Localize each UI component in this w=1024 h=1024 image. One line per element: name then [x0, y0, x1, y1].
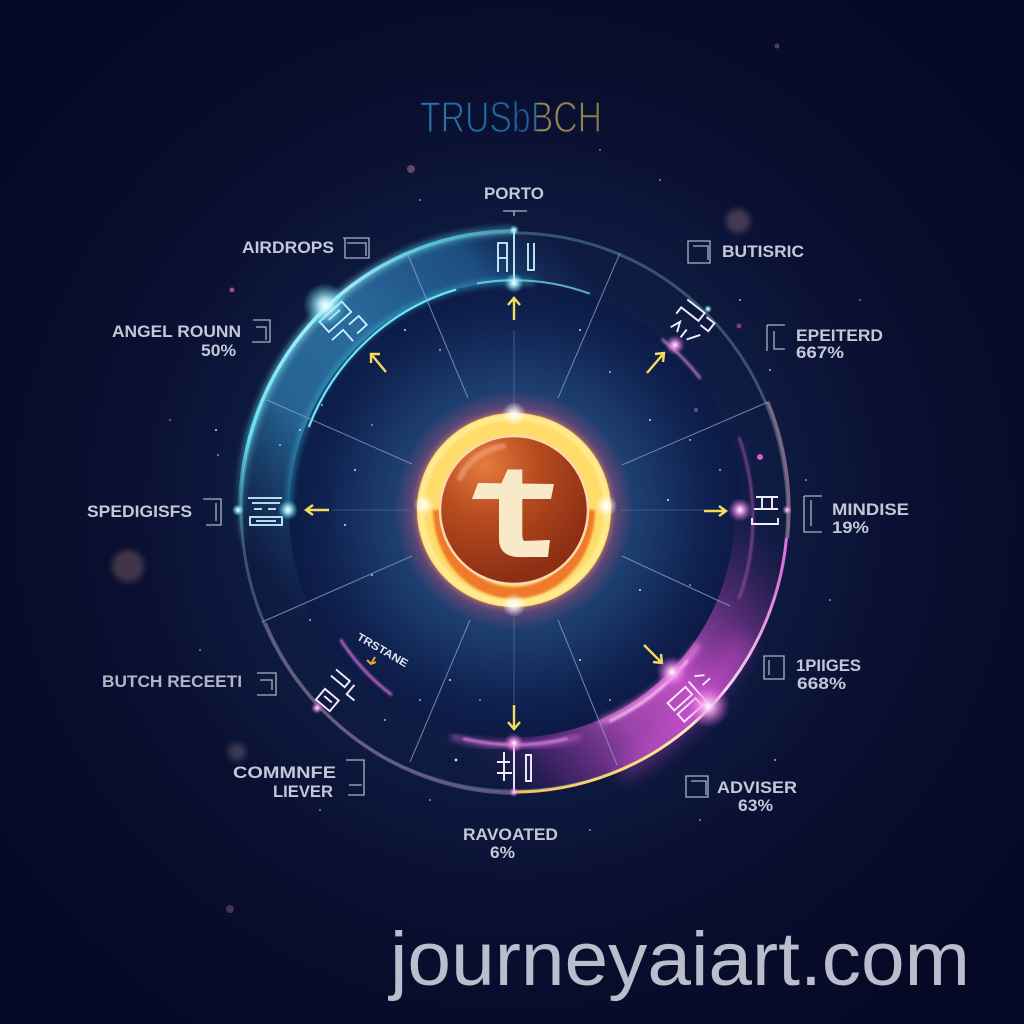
- label: MINDISE 19%: MINDISE: [832, 500, 909, 519]
- glyph: bottom: [497, 743, 531, 790]
- central disc: [286, 284, 742, 740]
- ring rim: dim pink right: [768, 402, 789, 538]
- label: MINDISE 19%: [804, 496, 909, 537]
- inner highlight: right: [739, 437, 753, 599]
- inner highlight: lower right: [600, 644, 698, 722]
- coin shine: [460, 446, 503, 478]
- arrow: left: [306, 505, 329, 515]
- coin letter crossbar: [472, 483, 554, 499]
- glyph: upper left: [317, 300, 369, 351]
- label: SPEDIGISFS: SPEDIGISFS: [87, 502, 192, 521]
- arrow: top: [508, 298, 520, 320]
- label: COMMNFE LIEVER: COMMNFE: [233, 763, 336, 782]
- label: ADVISER 63%: [686, 776, 797, 815]
- arrow: bottom: [508, 705, 520, 729]
- ring outline: [242, 233, 787, 791]
- coin face: [440, 436, 588, 584]
- coin inner rim shade: [439, 510, 589, 593]
- label: BUTCH RECEETI: [102, 672, 276, 695]
- coin letter foot: [522, 540, 550, 557]
- glyph: lower left: [313, 669, 362, 719]
- ring glow: magenta: [619, 639, 743, 771]
- label: BUTISRIC: [688, 241, 804, 263]
- inner highlight: bottom: [451, 736, 580, 746]
- label: AIRDROPS: AIRDROPS: [242, 238, 334, 257]
- label: EPEITERD 667%: [767, 325, 883, 362]
- label: EPEITERD 667%: EPEITERD: [796, 326, 883, 345]
- bokeh particles: [112, 44, 780, 913]
- ring rim: magenta yellow outer: [514, 538, 786, 792]
- glyph: lower right: [666, 669, 721, 722]
- glyph: upper right: [666, 300, 716, 348]
- stars: [169, 149, 861, 831]
- label: SPEDIGISFS: [87, 499, 221, 525]
- label: ADVISER 63%: 63%: [738, 796, 773, 815]
- label: BUTCH RECEETI: BUTCH RECEETI: [102, 672, 242, 691]
- glyph: right: [752, 497, 778, 524]
- watermark: journeyaiart.com: [388, 917, 970, 1002]
- ring segment: purple band: [471, 469, 761, 765]
- ring rim: cyan inner: [289, 280, 590, 512]
- label: ANGEL ROUNN 50%: 50%: [201, 341, 236, 360]
- yellow arrows: [306, 298, 726, 729]
- label: EPEITERD 667%: 667%: [796, 343, 844, 362]
- arrow: right: [704, 506, 726, 516]
- label: RAVOATED 6%: [463, 825, 558, 862]
- glyph: left: [248, 498, 282, 525]
- ring rim: cyan outer: [240, 231, 515, 629]
- label: RAVOATED 6%: RAVOATED: [463, 825, 558, 844]
- small label: TRSTANE on arc: TRSTANE: [354, 631, 410, 670]
- coin letter: t: [485, 437, 543, 585]
- coin flares: [502, 402, 526, 426]
- title: TRUSbBCH: [420, 93, 602, 142]
- ring rim: pink-grey lower left: [265, 623, 514, 793]
- label: ANGEL ROUNN 50%: [112, 320, 270, 360]
- coin halo: [394, 390, 634, 630]
- label: COMMNFE LIEVER: [233, 760, 364, 801]
- coin gold rim: [428, 424, 600, 596]
- label: 1PIIGES 668%: [764, 656, 861, 693]
- label: PORTO: [484, 184, 544, 216]
- arrow: upper left: [371, 354, 386, 372]
- label: ANGEL ROUNN 50%: ANGEL ROUNN: [112, 322, 241, 341]
- ring: segmented allocation wheel: [240, 231, 789, 793]
- label: AIRDROPS: [242, 238, 369, 258]
- ring segment: blue band: [264, 256, 600, 620]
- inner highlight: upper right: [662, 339, 700, 379]
- label: MINDISE 19%: 19%: [832, 518, 869, 537]
- ring glyphs: [248, 232, 778, 790]
- label: 1PIIGES 668%: 668%: [797, 674, 846, 693]
- label: BUTISRIC: BUTISRIC: [722, 242, 804, 261]
- label: RAVOATED 6%: 6%: [490, 843, 515, 862]
- label: PORTO: PORTO: [484, 184, 544, 203]
- label: ADVISER 63%: ADVISER: [717, 778, 797, 797]
- coin letter: [472, 437, 554, 585]
- label: COMMNFE LIEVER: LIEVER: [273, 782, 333, 801]
- arrow: small orange: [367, 657, 376, 664]
- arrow: lower right: [644, 645, 662, 663]
- glyph: top: [498, 232, 534, 282]
- coin outer rim light: [421, 417, 607, 603]
- ring flares: [232, 225, 792, 797]
- coin: [394, 390, 634, 630]
- label: 1PIIGES 668%: 1PIIGES: [796, 656, 861, 675]
- arrow: upper right: [647, 353, 664, 373]
- inner highlight: lower left: [340, 639, 392, 695]
- spokes: [262, 253, 768, 765]
